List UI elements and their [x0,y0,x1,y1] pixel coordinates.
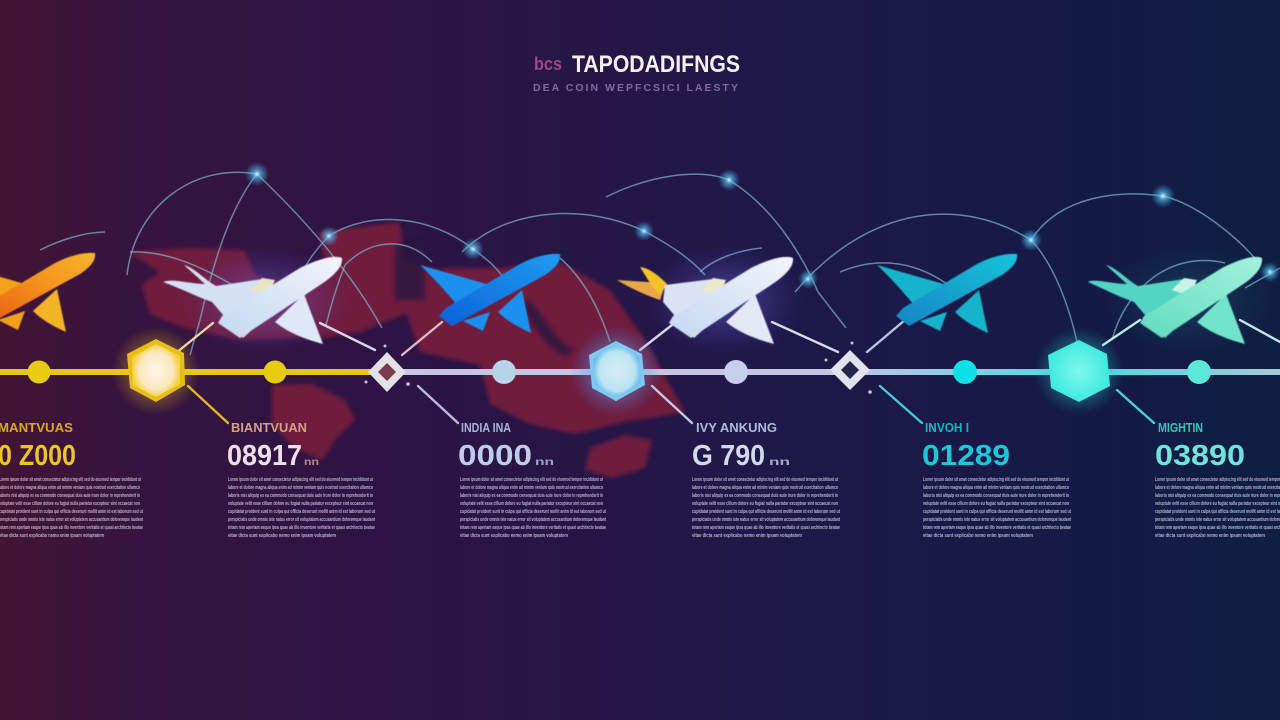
column 2 unit: nn [304,457,319,468]
column 3 value: 0000 [458,440,532,472]
column 1 body text: voluptate velit esse cillum dolore eu fugiat nulla pariatur excepteur sint occaecat non [0,501,140,507]
column 1 body text: perspiciatis unde omnis iste natus error sit voluptatem accusantium doloremque laudant [0,517,143,523]
plane glows [180,245,1275,355]
column 3 body text: perspiciatis unde omnis iste natus error sit voluptatem accusantium doloremque laudant [460,517,606,523]
milestone hexagon: yellow [112,327,200,415]
column 5 body text: laboris nisi aliquip ex ea commodo consequat duis aute irure dolor in reprehenderit in [923,493,1069,499]
column 3 label: INDIA INA [461,421,511,435]
column 5 label: INVOH I [925,421,969,435]
icon: white plane 2 with orange tail [617,257,793,344]
map dark inland patch [395,240,575,356]
glowing route nodes [245,162,1280,289]
column 2 body text [228,477,375,539]
column 1 label: MANTVUAS [0,421,73,435]
icon: mint plane [1088,257,1262,344]
column 2 body text: labore et dolore magna aliqua enim ad minim veniam quis nostrud exercitation ullamco [228,485,373,491]
column 1 body text: vitae dicta sunt explicabo nemo enim ipsam voluptatem [0,533,104,539]
column 3 body text [460,477,606,539]
column 1 [0,421,143,539]
diamond chip 1 [364,344,410,392]
column 4 body text: Lorem ipsum dolor sit amet consectetur adipiscing elit sed do eiusmod tempor incididunt ut [692,477,838,483]
column 6 body text [1155,477,1280,539]
column 3 body text: cupidatat proident sunt in culpa qui officia deserunt mollit anim id est laborum sed ut [460,509,606,515]
column 1 body text: totam rem aperiam eaque ipsa quae ab illo inventore veritatis et quasi architecto beatae [0,525,143,531]
milestone hexagon: blue [570,325,662,417]
column 5 [922,421,1071,539]
column 4 body text [692,477,840,539]
column 3 body text: laboris nisi aliquip ex ea commodo consequat duis aute irure dolor in reprehenderit in [460,493,603,499]
column 5 body text: perspiciatis unde omnis iste natus error sit voluptatem accusantium doloremque laudant [923,517,1071,523]
column 5 body text: vitae dicta sunt explicabo nemo enim ipsam voluptatem [923,533,1033,539]
column 6 value: 03890 [1155,440,1245,472]
column 1 value: 0 Z000 [0,440,76,472]
column 3 body text: totam rem aperiam eaque ipsa quae ab illo inventore veritatis et quasi architecto beatae [460,525,606,531]
column 5 body text: voluptate velit esse cillum dolore eu fugiat nulla pariatur excepteur sint occaecat non [923,501,1069,507]
icon: orange plane [0,253,95,332]
subtitle: DEA COIN WEPFCSICI LAESTY [533,82,738,94]
column 5 body text: labore et dolore magna aliqua enim ad minim veniam quis nostrud exercitation ullamco [923,485,1069,491]
column 4 value: G 790 [692,440,765,472]
column 3 body text: voluptate velit esse cillum dolore eu fugiat nulla pariatur excepteur sint occaecat non [460,501,603,507]
column 4 unit: nn [769,457,790,468]
world map silhouette [128,222,685,478]
column 3 unit: nn [535,457,554,468]
column 4 label: IVY ANKUNG [696,421,777,435]
column 3 body text: Lorem ipsum dolor sit amet consectetur adipiscing elit sed do eiusmod tempor incididunt ut [460,477,603,483]
column 3 [458,421,606,539]
timeline bar [0,369,1280,375]
column 6 [1155,421,1280,539]
milestone hexagon: cyan [1035,327,1123,415]
icon: white plane 1 [163,257,342,344]
timeline dots [28,360,1211,384]
column 5 body text: totam rem aperiam eaque ipsa quae ab illo inventore veritatis et quasi architecto beatae [923,525,1071,531]
column 5 body text: Lorem ipsum dolor sit amet consectetur adipiscing elit sed do eiusmod tempor incididunt ut [923,477,1069,483]
column 2 body text: laboris nisi aliquip ex ea commodo consequat duis aute irure dolor in reprehenderit in [228,493,373,499]
connector lines [176,320,1280,423]
title prefix: bcs [534,54,562,74]
column 2 body text: vitae dicta sunt explicabo nemo enim ipsam voluptatem [228,533,336,539]
flight route arcs [40,172,1280,355]
column 2 body text: cupidatat proident sunt in culpa qui officia deserunt mollit anim id est laborum sed ut [228,509,375,515]
column 1 body text: Lorem ipsum dolor sit amet consectetur adipiscing elit sed do eiusmod tempor incididunt ut [0,477,141,483]
column 1 body text: laboris nisi aliquip ex ea commodo consequat duis aute irure dolor in reprehenderit in [0,493,140,499]
title [533,51,740,94]
column 2 value: 08917 [227,440,302,472]
column 1 body text: cupidatat proident sunt in culpa qui officia deserunt mollit anim id est laborum sed ut [0,509,143,515]
column 6 label: MIGHTIN [1158,421,1203,435]
column 3 body text: labore et dolore magna aliqua enim ad minim veniam quis nostrud exercitation ullamco [460,485,603,491]
column 1 body text [0,477,143,539]
icon: teal plane [877,254,1017,333]
column 2 body text: perspiciatis unde omnis iste natus error sit voluptatem accusantium doloremque laudant [228,517,375,523]
title text: TAPODADIFNGS [572,51,740,78]
column 2 body text: Lorem ipsum dolor sit amet consectetur adipiscing elit sed do eiusmod tempor incididunt ut [228,477,373,483]
column 4 body text: cupidatat proident sunt in culpa qui officia deserunt mollit anim id est laborum sed ut [692,509,840,515]
column 1 body text: labore et dolore magna aliqua enim ad minim veniam quis nostrud exercitation ullamco [0,485,140,491]
column 4 [692,421,840,539]
column 4 body text: labore et dolore magna aliqua enim ad minim veniam quis nostrud exercitation ullamco [692,485,838,491]
column 4 body text: laboris nisi aliquip ex ea commodo consequat duis aute irure dolor in reprehenderit in [692,493,838,499]
column 3 body text: vitae dicta sunt explicabo nemo enim ipsam voluptatem [460,533,568,539]
icon: blue plane [420,254,560,333]
column 4 body text: totam rem aperiam eaque ipsa quae ab illo inventore veritatis et quasi architecto beatae [692,525,840,531]
column 4 body text: voluptate velit esse cillum dolore eu fugiat nulla pariatur excepteur sint occaecat non [692,501,838,507]
column 4 body text: perspiciatis unde omnis iste natus error sit voluptatem accusantium doloremque laudant [692,517,840,523]
diamond chip 2 [824,342,872,394]
column 5 body text: cupidatat proident sunt in culpa qui officia deserunt mollit anim id est laborum sed ut [923,509,1071,515]
column 4 body text: vitae dicta sunt explicabo nemo enim ipsam voluptatem [692,533,802,539]
column 2 body text: voluptate velit esse cillum dolore eu fugiat nulla pariatur excepteur sint occaecat non [228,501,373,507]
column 5 value: 01289 [922,440,1010,472]
column 2 body text: totam rem aperiam eaque ipsa quae ab illo inventore veritatis et quasi architecto beatae [228,525,375,531]
column 2 label: BIANTVUAN [231,421,307,435]
column 2 [227,421,375,539]
column 5 body text [923,477,1071,539]
